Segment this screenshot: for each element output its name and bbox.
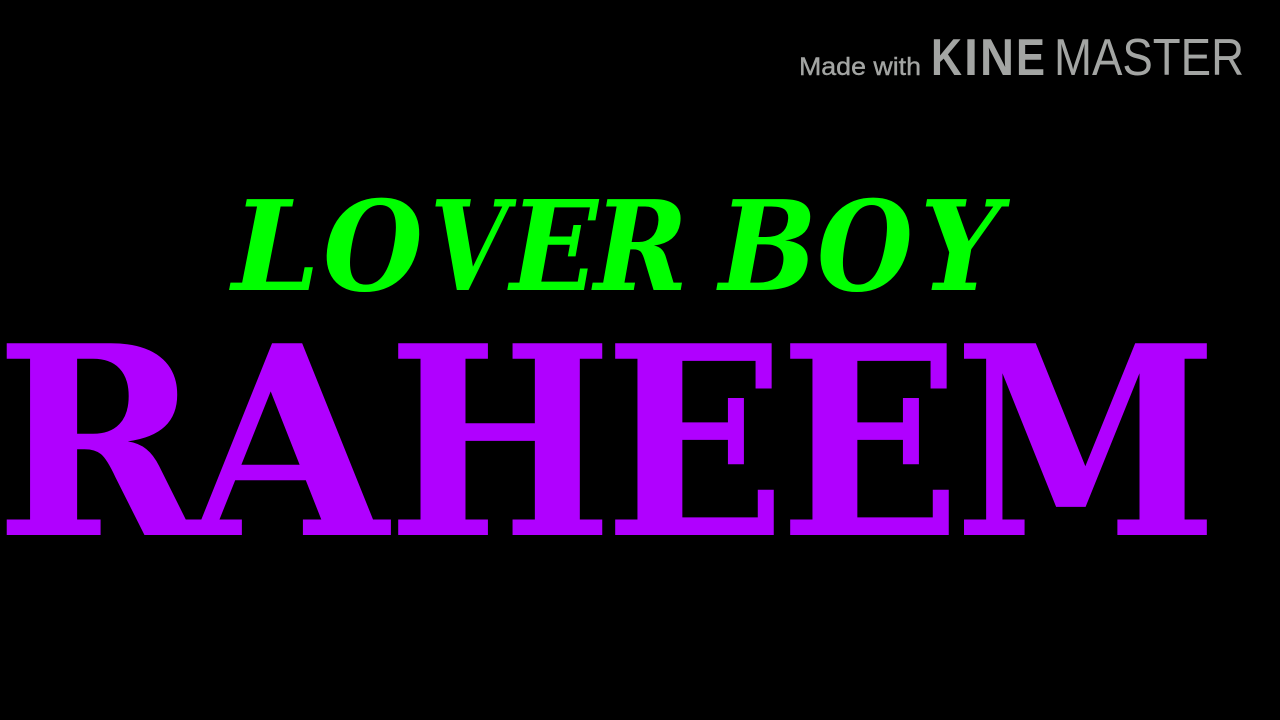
title: LOVER BOY: O bbox=[817, 174, 913, 320]
title: LOVER BOY: L bbox=[229, 174, 320, 320]
name: RAHEEM: E bbox=[779, 289, 961, 598]
name: RAHEEM bbox=[0, 289, 1218, 598]
title: LOVER BOY: Y bbox=[920, 174, 1011, 320]
watermark: Made with KineMaster: I bbox=[964, 29, 978, 87]
name: RAHEEM: H bbox=[387, 289, 613, 598]
name: RAHEEM: A bbox=[184, 289, 393, 598]
watermark: Made with KineMaster: MASTER bbox=[1054, 29, 1244, 87]
watermark: Made with KineMaster: Made with bbox=[799, 53, 921, 81]
title: LOVER BOY: E bbox=[507, 174, 600, 320]
watermark: Made with KineMaster: E bbox=[1016, 29, 1045, 87]
title: LOVER BOY: O bbox=[323, 174, 423, 320]
title: LOVER BOY: V bbox=[430, 174, 517, 320]
watermark: Made with KineMaster: K bbox=[931, 29, 962, 87]
name: RAHEEM: M bbox=[954, 289, 1218, 598]
watermark: Made with KineMaster: N bbox=[980, 29, 1014, 87]
name: RAHEEM: R bbox=[0, 289, 206, 598]
title: LOVER BOY: R bbox=[591, 174, 688, 320]
name: RAHEEM: E bbox=[604, 289, 786, 598]
watermark: Made with KineMaster bbox=[799, 29, 1244, 87]
title: LOVER BOY bbox=[229, 174, 1011, 320]
title: LOVER BOY: B bbox=[716, 174, 817, 320]
